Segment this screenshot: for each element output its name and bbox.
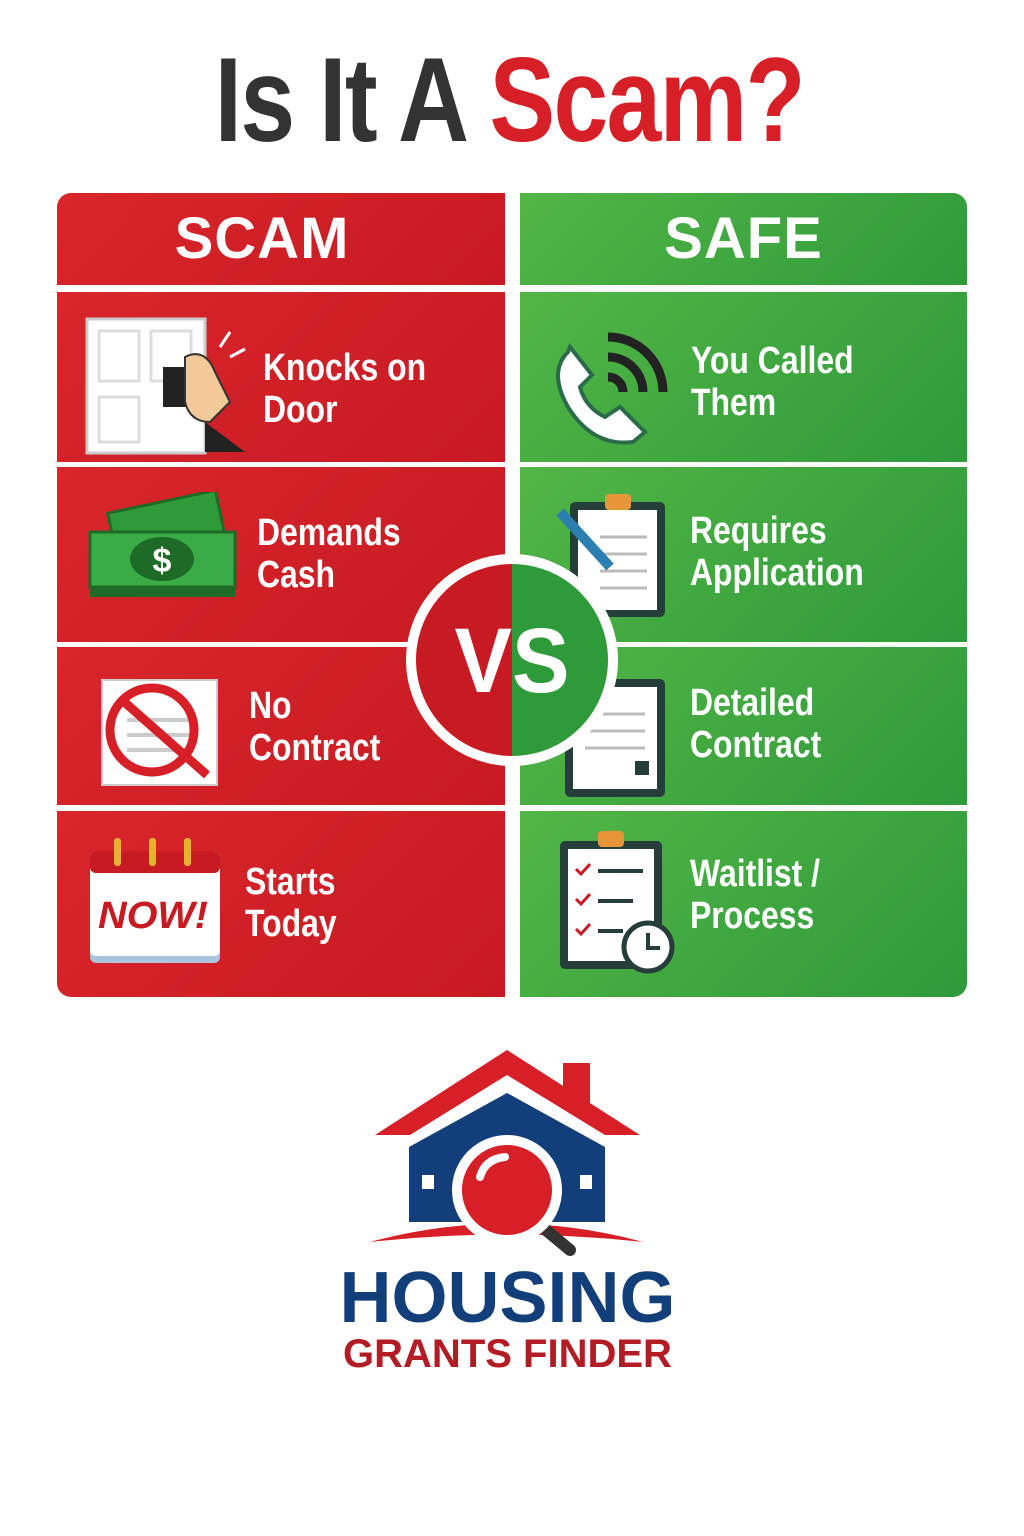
- icon: calendar now: NOW!: [98, 895, 208, 937]
- row: knocks on door: [57, 292, 505, 462]
- row: no contract: [57, 647, 505, 805]
- text: Contract: [249, 727, 380, 769]
- logo text: GRANTS FINDER: [343, 1332, 672, 1376]
- text: Contract: [690, 724, 821, 766]
- logo icon: house with magnifier: [370, 1050, 643, 1256]
- icon: checklist clock: [560, 831, 674, 974]
- text: [263, 347, 426, 431]
- safe header: SAFE: [664, 206, 823, 271]
- text: Today: [245, 903, 337, 945]
- text: [245, 861, 337, 945]
- row: requires application: [520, 467, 967, 642]
- text: Application: [690, 552, 864, 594]
- row: detailed contract: [520, 647, 967, 805]
- logo: [339, 1050, 676, 1376]
- text: [690, 682, 821, 766]
- text: Process: [690, 895, 814, 937]
- text: You Called: [691, 340, 854, 382]
- text: No: [249, 685, 292, 727]
- text: Requires: [690, 510, 827, 552]
- text: [690, 510, 864, 594]
- panel: scam column: [57, 193, 505, 997]
- safe header: [520, 193, 967, 285]
- text: Them: [691, 382, 776, 424]
- VS badge: VS: [454, 610, 570, 712]
- text: [257, 512, 401, 596]
- text: Waitlist /: [690, 853, 820, 895]
- icon: calendar now: [90, 838, 220, 963]
- text: Knocks on: [263, 347, 426, 389]
- icon: clipboard pencil: [556, 494, 665, 617]
- row: starts today: [57, 811, 505, 997]
- row: you called them: [520, 292, 967, 462]
- icon: cash: $: [153, 542, 172, 580]
- text: [249, 685, 380, 769]
- scam header: SCAM: [175, 206, 349, 271]
- text: Demands: [257, 512, 401, 554]
- icon: phone: [556, 332, 668, 444]
- text: [691, 340, 854, 424]
- text: Starts: [245, 861, 335, 903]
- logo text: HOUSING: [339, 1258, 676, 1338]
- icon: cash: [88, 492, 236, 597]
- icon: door knock: [86, 318, 246, 454]
- scam header: [57, 193, 505, 285]
- icon: contract clipboard: [565, 679, 665, 797]
- panel: safe column: [520, 193, 967, 997]
- logo text: [339, 1258, 676, 1376]
- text: [690, 853, 820, 937]
- text: Cash: [257, 554, 335, 596]
- title: Is It A Scam?: [215, 33, 804, 167]
- VS badge: [406, 554, 618, 766]
- row: demands cash: [57, 467, 505, 642]
- text: Door: [263, 389, 337, 431]
- row: waitlist: [520, 811, 967, 997]
- icon: no contract: [101, 679, 218, 786]
- text: Detailed: [690, 682, 814, 724]
